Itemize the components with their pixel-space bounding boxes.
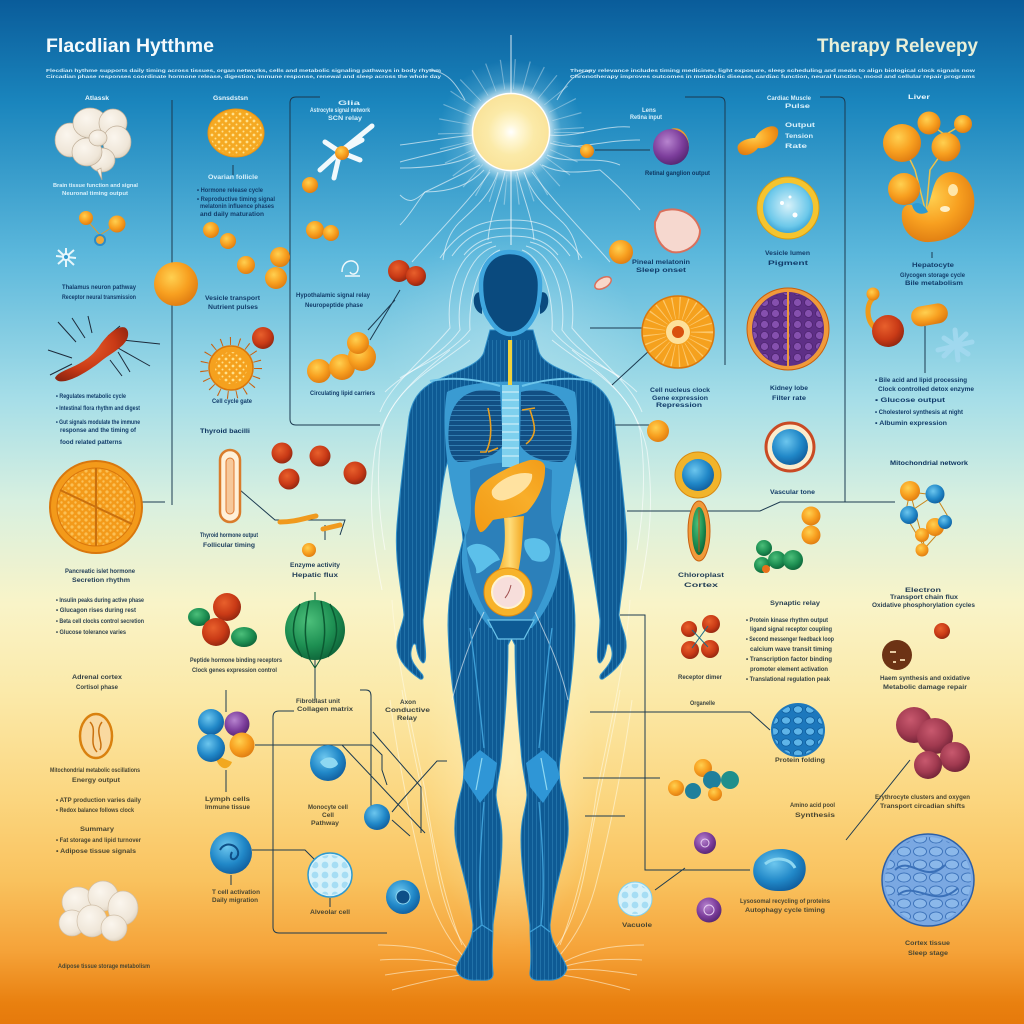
caption <box>630 108 662 121</box>
caption: Enzyme activity <box>290 563 341 569</box>
caption: Haem synthesis and oxidative <box>880 676 971 682</box>
bullets: promoter element activation <box>750 667 828 673</box>
panel: second column <box>197 95 290 549</box>
leg veins <box>470 628 552 932</box>
caption <box>296 293 371 309</box>
heading: Liver <box>908 94 931 101</box>
caption: Immune tissue <box>205 805 251 811</box>
text block: Summary <box>80 827 115 833</box>
caption: Output <box>785 123 815 129</box>
caption: Brain tissue function and signal <box>53 183 138 189</box>
caption: Transport circadian shifts <box>880 804 966 810</box>
caption: Glycogen storage cycle <box>900 273 966 279</box>
caption <box>872 588 976 609</box>
icon: pale ball <box>618 882 652 916</box>
icon: orange disc <box>50 461 142 553</box>
bullets: response and the timing of <box>60 428 137 434</box>
caption: Bile metabolism <box>905 281 963 287</box>
caption: Metabolic damage repair <box>883 685 968 691</box>
text block: Thalamus neuron pathway <box>62 285 137 291</box>
bullets: Clock controlled detox enzyme <box>878 387 975 393</box>
icon: orange squiggles <box>280 516 340 529</box>
text block: Adrenal cortex <box>72 675 123 681</box>
caption <box>900 263 966 287</box>
icon: red balls <box>388 260 426 286</box>
caption: Repression <box>656 403 702 409</box>
ears <box>474 292 548 314</box>
caption: Gene expression <box>652 396 708 402</box>
icon: small blue ball <box>364 804 390 830</box>
caption: Alveolar cell <box>310 910 350 916</box>
pelvic organ ring <box>484 568 532 616</box>
heading: Mitochondrial network <box>890 461 969 467</box>
text block: Mitochondrial metabolic oscillations <box>50 768 141 774</box>
knee caps <box>463 750 560 803</box>
heading: Gsnsdstsn <box>213 95 248 102</box>
icon: blue textured ball <box>771 703 825 757</box>
icon: white brain cluster <box>55 108 131 180</box>
caption: Relay <box>397 716 418 722</box>
icon: white star <box>56 248 76 267</box>
intro text: left: Circadian phase responses coordinate hormone release, digestion, immune response, renewal and sleep across the whole day <box>46 74 442 79</box>
caption: Hepatocyte <box>912 263 955 269</box>
caption: Amino acid pool <box>790 803 835 809</box>
caption: Kidney lobe <box>770 386 809 392</box>
caption: Pigment <box>768 261 808 267</box>
groin nerves <box>452 612 568 700</box>
icon: purple ball <box>696 898 722 922</box>
text block: Ovarian follicle <box>208 175 259 181</box>
caption: Cell nucleus clock <box>650 388 711 394</box>
intro text: right: Therapy relevance includes timing medicines, light exposure, sleep scheduling and meals to align biological clock signals now <box>570 68 976 73</box>
body silhouette <box>396 330 627 980</box>
caption: Vesicle transport <box>205 296 260 302</box>
icon: small orange ball <box>580 144 594 158</box>
caption <box>200 533 258 549</box>
head <box>481 252 540 334</box>
caption: Retinal ganglion output <box>645 171 710 177</box>
intestine tube <box>496 516 524 580</box>
text block: • Redox balance follows clock <box>56 808 135 814</box>
icon: small red ball <box>934 623 950 639</box>
text block: • Hormone release cycle <box>197 188 264 194</box>
icon: orange balls <box>302 177 339 241</box>
icon: orange dotted disc <box>208 109 264 157</box>
text block: melatonin influence phases <box>200 204 275 210</box>
icon: orange teal molecules <box>668 759 739 801</box>
title: right: Therapy Relevepy <box>817 36 978 57</box>
caption: Hepatic flux <box>292 573 339 579</box>
liver <box>475 460 545 532</box>
heart outline <box>480 408 535 452</box>
heading: Glia <box>338 101 361 107</box>
caption: Autophagy cycle timing <box>745 908 825 914</box>
caption <box>770 386 809 402</box>
caption: Monocyte cell <box>308 805 348 811</box>
panel: left column <box>48 95 198 970</box>
spine <box>502 385 519 467</box>
icon: green striped melon <box>285 592 345 668</box>
icon: orange chain <box>307 332 376 383</box>
caption: Daily migration <box>212 898 258 904</box>
text block: • Beta cell clocks control secretion <box>56 619 144 625</box>
icon: ring ball <box>675 452 721 498</box>
caption <box>212 890 350 916</box>
icon: orange oval organ <box>80 714 112 758</box>
shoulder collar line <box>430 379 592 386</box>
icon: bacterium with legs <box>48 316 160 381</box>
caption: Rate <box>785 144 808 150</box>
caption: Circulating lipid carriers <box>310 391 376 397</box>
caption: Erythrocyte clusters and oxygen <box>875 795 970 801</box>
caption <box>650 388 711 409</box>
caption <box>880 676 971 691</box>
caption <box>205 296 260 311</box>
caption: T cell activation <box>212 890 260 896</box>
bullets: • Protein kinase rhythm output <box>746 618 828 624</box>
pelvic wedge <box>488 620 534 639</box>
panel: right inner column <box>738 96 829 496</box>
caption: Cortex tissue <box>905 941 951 947</box>
bullets: • Second messenger feedback loop <box>746 637 834 643</box>
icon: green molecule <box>754 540 803 573</box>
text block <box>50 768 142 855</box>
bullets: ligand signal receptor coupling <box>750 627 832 633</box>
icon: red ring ball <box>766 423 814 471</box>
text block: • Adipose tissue signals <box>56 849 137 855</box>
icon: orange capsule <box>910 302 949 328</box>
caption <box>632 260 690 274</box>
bullets: food related patterns <box>60 440 123 446</box>
caption: Sleep onset <box>636 268 686 274</box>
caption: Lymph cells <box>205 797 251 803</box>
intro text: right <box>570 68 976 79</box>
caption: Nutrient pulses <box>208 305 259 311</box>
icon: small receptor <box>342 261 360 276</box>
text block: Receptor neural transmission <box>62 295 136 301</box>
caption: Hypothalamic signal relay <box>296 293 371 299</box>
text block: • Glucose tolerance varies <box>56 630 127 636</box>
icon: yellow ring ball <box>757 177 819 239</box>
spinal cord <box>508 340 512 388</box>
bullets: • Bile acid and lipid processing <box>875 378 967 384</box>
text block <box>197 175 275 218</box>
caption: Axon <box>400 700 416 706</box>
icon: purple organ <box>747 288 829 370</box>
icon: orange ball <box>609 240 633 264</box>
caption: Protein folding <box>775 758 825 764</box>
icon: small pink organ <box>593 274 613 292</box>
caption <box>205 797 348 827</box>
panel: right outer column <box>866 94 976 957</box>
text block: • Glucagon rises during rest <box>56 608 136 614</box>
icon: capsule <box>220 450 240 522</box>
text block <box>62 285 137 301</box>
icon: blue blob <box>753 849 806 891</box>
caption: Lens <box>642 108 657 114</box>
caption: Neuronal timing output <box>62 191 128 197</box>
caption: Transport chain flux <box>890 595 959 601</box>
caption: Vascular tone <box>770 490 816 496</box>
caption: Vesicle lumen <box>765 251 810 257</box>
bullets: • Cholesterol synthesis at night <box>875 410 963 416</box>
icon: orange sunburst cell <box>642 296 714 368</box>
text block: Secretion rhythm <box>72 578 130 584</box>
icon: orange pair <box>802 506 820 544</box>
icon: orange organ bag <box>883 112 974 242</box>
caption: Organelle <box>690 701 716 707</box>
caption <box>767 96 815 150</box>
caption: Sleep stage <box>908 951 949 957</box>
icon: white fat cluster <box>59 881 138 941</box>
bullets <box>746 618 834 683</box>
connector lines <box>120 97 932 933</box>
muscle striations <box>390 340 635 985</box>
icon: large orange ball <box>154 262 198 306</box>
caption <box>190 658 431 722</box>
icon: sunburst cell with red ball <box>204 327 274 395</box>
caption: Neuropeptide phase <box>305 303 364 309</box>
text block: • Reproductive timing signal <box>197 197 275 203</box>
caption: Filter rate <box>772 396 807 402</box>
caption: Conductive <box>385 708 431 714</box>
bullets <box>875 378 975 427</box>
text block: and daily maturation <box>200 212 264 218</box>
heading: Astrocyte signal network <box>310 108 371 114</box>
text block <box>56 569 145 636</box>
panel: central-left cluster <box>188 101 431 916</box>
caption <box>678 573 821 607</box>
intro text: right: Chronotherapy improves outcomes in metabolic disease, cardiac function, neural function, mood and cellular repair programs <box>570 74 976 79</box>
caption: Collagen matrix <box>297 707 354 713</box>
icon: purple ball <box>694 832 716 854</box>
caption: Lysosomal recycling of proteins <box>740 899 831 905</box>
text block: • Fat storage and lipid turnover <box>56 838 142 844</box>
icon: mitochondria shape <box>655 209 700 252</box>
caption <box>875 795 970 810</box>
human body figure <box>390 252 635 985</box>
icon: green and red molecule <box>188 593 257 647</box>
heading <box>310 101 371 122</box>
icon: red balls group <box>272 442 366 490</box>
heading: Thyroid bacilli <box>200 429 250 435</box>
text block: • Insulin peaks during active phase <box>56 598 145 604</box>
text block: Cortisol phase <box>76 685 119 691</box>
caption: Receptor dimer <box>678 675 723 681</box>
icon: brown ball <box>882 640 912 670</box>
icon: sun with rays <box>439 35 583 245</box>
icon: blue-white star <box>938 330 972 360</box>
bullets <box>56 394 141 446</box>
icon: green leaf <box>688 501 710 561</box>
bullets: • Intestinal flora rhythm and digest <box>56 406 140 412</box>
icon: orange peanut <box>738 126 778 155</box>
bullets: calcium wave transit timing <box>750 647 832 653</box>
title: left: Flacdlian Hytthme <box>46 36 214 57</box>
torso panel <box>445 382 577 628</box>
caption: Retina input <box>630 115 662 121</box>
panel: central-right cluster <box>580 108 836 929</box>
bullets: • Regulates metabolic cycle <box>56 394 127 400</box>
icon: small orange ball <box>302 543 316 557</box>
caption: Synthesis <box>795 813 836 819</box>
kidneys <box>467 538 550 573</box>
caption: Vacuole <box>622 923 653 929</box>
icon: blue cell <box>210 832 252 874</box>
caption <box>790 803 836 819</box>
icon: pale blue cell <box>308 853 352 897</box>
bullets: • Albumin expression <box>875 421 947 427</box>
caption: Adipose tissue storage metabolism <box>58 964 150 970</box>
text block <box>72 675 123 691</box>
intro text: left <box>46 68 442 79</box>
icon: red molecule group <box>681 615 720 659</box>
icon: neuron star <box>320 126 372 178</box>
icon: orange molecules <box>79 211 126 245</box>
caption: Thyroid hormone output <box>200 533 258 539</box>
caption <box>290 563 341 579</box>
caption: Pineal melatonin <box>632 260 690 266</box>
heading: SCN relay <box>328 116 363 122</box>
caption: Cell cycle gate <box>212 399 253 405</box>
icon: maroon cluster <box>896 707 970 779</box>
caption: Electron <box>905 588 941 594</box>
caption: Pathway <box>311 821 340 827</box>
caption <box>765 251 810 267</box>
icon: multicolor molecule <box>197 709 254 768</box>
intro text: left: Flecdian hythme supports daily timing across tissues, organ networks, cells and metabolic signaling pathways in body rhythm <box>46 68 441 73</box>
caption <box>622 899 831 929</box>
icon: molecular cluster <box>900 481 952 556</box>
soft glow behind the figure <box>381 230 641 950</box>
caption: Oxidative phosphorylation cycles <box>872 603 976 609</box>
caption: Cortex <box>684 583 719 589</box>
icon: orange balls <box>203 222 290 289</box>
nerve field lines around the body <box>371 70 651 990</box>
icon: cyan cell <box>310 745 346 781</box>
icon: dark blue ball <box>386 880 420 914</box>
text block: Pancreatic islet hormone <box>65 569 136 575</box>
caption <box>53 183 138 197</box>
bullets: • Translational regulation peak <box>746 677 831 683</box>
icon: red ball with tail <box>866 288 904 347</box>
caption: Cell <box>322 813 334 819</box>
caption: Cardiac Muscle <box>767 96 812 102</box>
lungs <box>448 390 572 462</box>
caption: Pulse <box>785 104 811 110</box>
caption: Peptide hormone binding receptors <box>190 658 283 664</box>
caption: Fibroblast unit <box>296 699 340 705</box>
bullets: • Transcription factor binding <box>746 657 832 663</box>
heading: Atlassk: Atlassk <box>85 95 109 102</box>
caption: Clock genes expression control <box>192 668 277 674</box>
icon: purple ball <box>653 128 689 165</box>
caption: Tension <box>785 134 813 140</box>
icon: blue convoluted disc <box>882 834 974 926</box>
text block: • ATP production varies daily <box>56 798 142 804</box>
caption <box>905 941 951 957</box>
bullets: • Glucose output <box>875 398 945 404</box>
caption: Synaptic relay <box>770 601 821 607</box>
icon: orange ball <box>647 420 669 442</box>
bullets: • Gut signals modulate the immune <box>56 420 141 426</box>
caption: Chloroplast <box>678 573 724 579</box>
text block: Energy output <box>72 778 120 784</box>
caption: Follicular timing <box>203 543 255 549</box>
